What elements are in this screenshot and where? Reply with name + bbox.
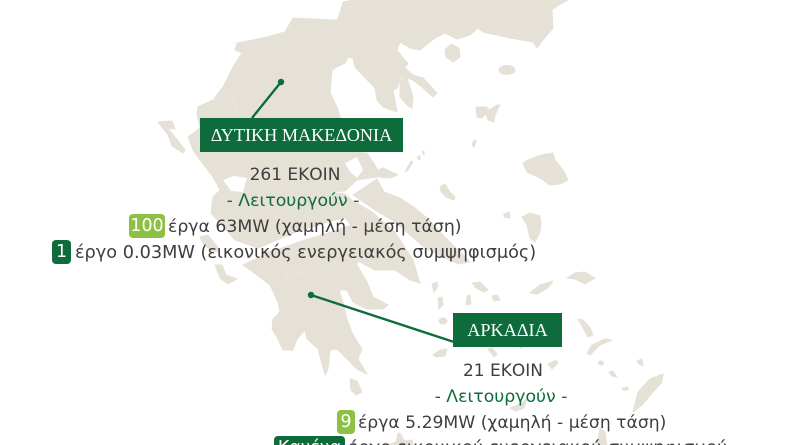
Cyclades <box>432 282 438 292</box>
Dodecanese <box>578 319 593 337</box>
Sporades <box>405 161 413 172</box>
Agios Efstratios <box>472 140 476 147</box>
Kythira <box>350 379 362 395</box>
Karpathos <box>597 428 607 445</box>
row: virtual net metering Arcadia <box>274 436 728 445</box>
text: έργο 0.03MW (εικονικός ενεργειακός συμψηφισμός) <box>75 243 536 263</box>
Lemnos <box>476 105 500 122</box>
heading: Arcadia <box>453 313 562 347</box>
Psara <box>504 212 510 218</box>
badge: 1 <box>52 240 71 264</box>
heading: Western Macedonia <box>200 118 403 152</box>
Chios <box>522 213 541 242</box>
Athos <box>400 57 437 97</box>
row: low-medium voltage Western Macedonia <box>129 214 462 238</box>
Rhodes <box>633 374 663 412</box>
row: low-medium voltage Arcadia <box>337 410 666 434</box>
text: status Arcadia: - Λειτουργούν - <box>435 387 567 407</box>
badge: 1: 1 <box>56 242 67 262</box>
southern islands <box>510 399 527 411</box>
Zakynthos <box>215 265 237 284</box>
Peloponnese <box>243 222 388 375</box>
Samos <box>567 272 595 284</box>
Lefkada <box>200 235 220 252</box>
Skyros <box>440 184 455 200</box>
badge: 100: 100 <box>130 216 164 236</box>
Sithonia <box>400 78 413 108</box>
Lesvos <box>523 153 568 185</box>
Ikaria <box>530 281 553 294</box>
text: status Western Macedonia: - Λειτουργούν - <box>227 191 359 211</box>
heading: Western Macedonia: ΔΥΤΙΚΗ ΜΑΚΕΔΟΝΙΑ <box>211 125 392 145</box>
text: έργα 5.29MW (χαμηλή - μέση τάση) <box>358 413 666 433</box>
badge: 9 <box>337 410 355 434</box>
heading: Arcadia: ΑΡΚΑΔΙΑ <box>467 320 548 340</box>
Samothrace <box>499 66 515 74</box>
Thasos <box>445 44 460 62</box>
mainland north and central <box>188 0 568 283</box>
Corfu <box>158 121 185 153</box>
Evia <box>353 179 470 264</box>
row: virtual net metering Western Macedonia <box>52 240 536 264</box>
text: total projects Arcadia: 21 ΕΚΟΙΝ <box>463 361 543 381</box>
badge: none <box>274 436 345 445</box>
badge: 9: 9 <box>340 412 352 432</box>
text: total projects Western Macedonia: 261 ΕΚΟΙΝ <box>250 165 340 185</box>
text: έργα 63MW (χαμηλή - μέση τάση) <box>168 217 462 237</box>
Thermaic and inner gulfs <box>223 176 247 192</box>
